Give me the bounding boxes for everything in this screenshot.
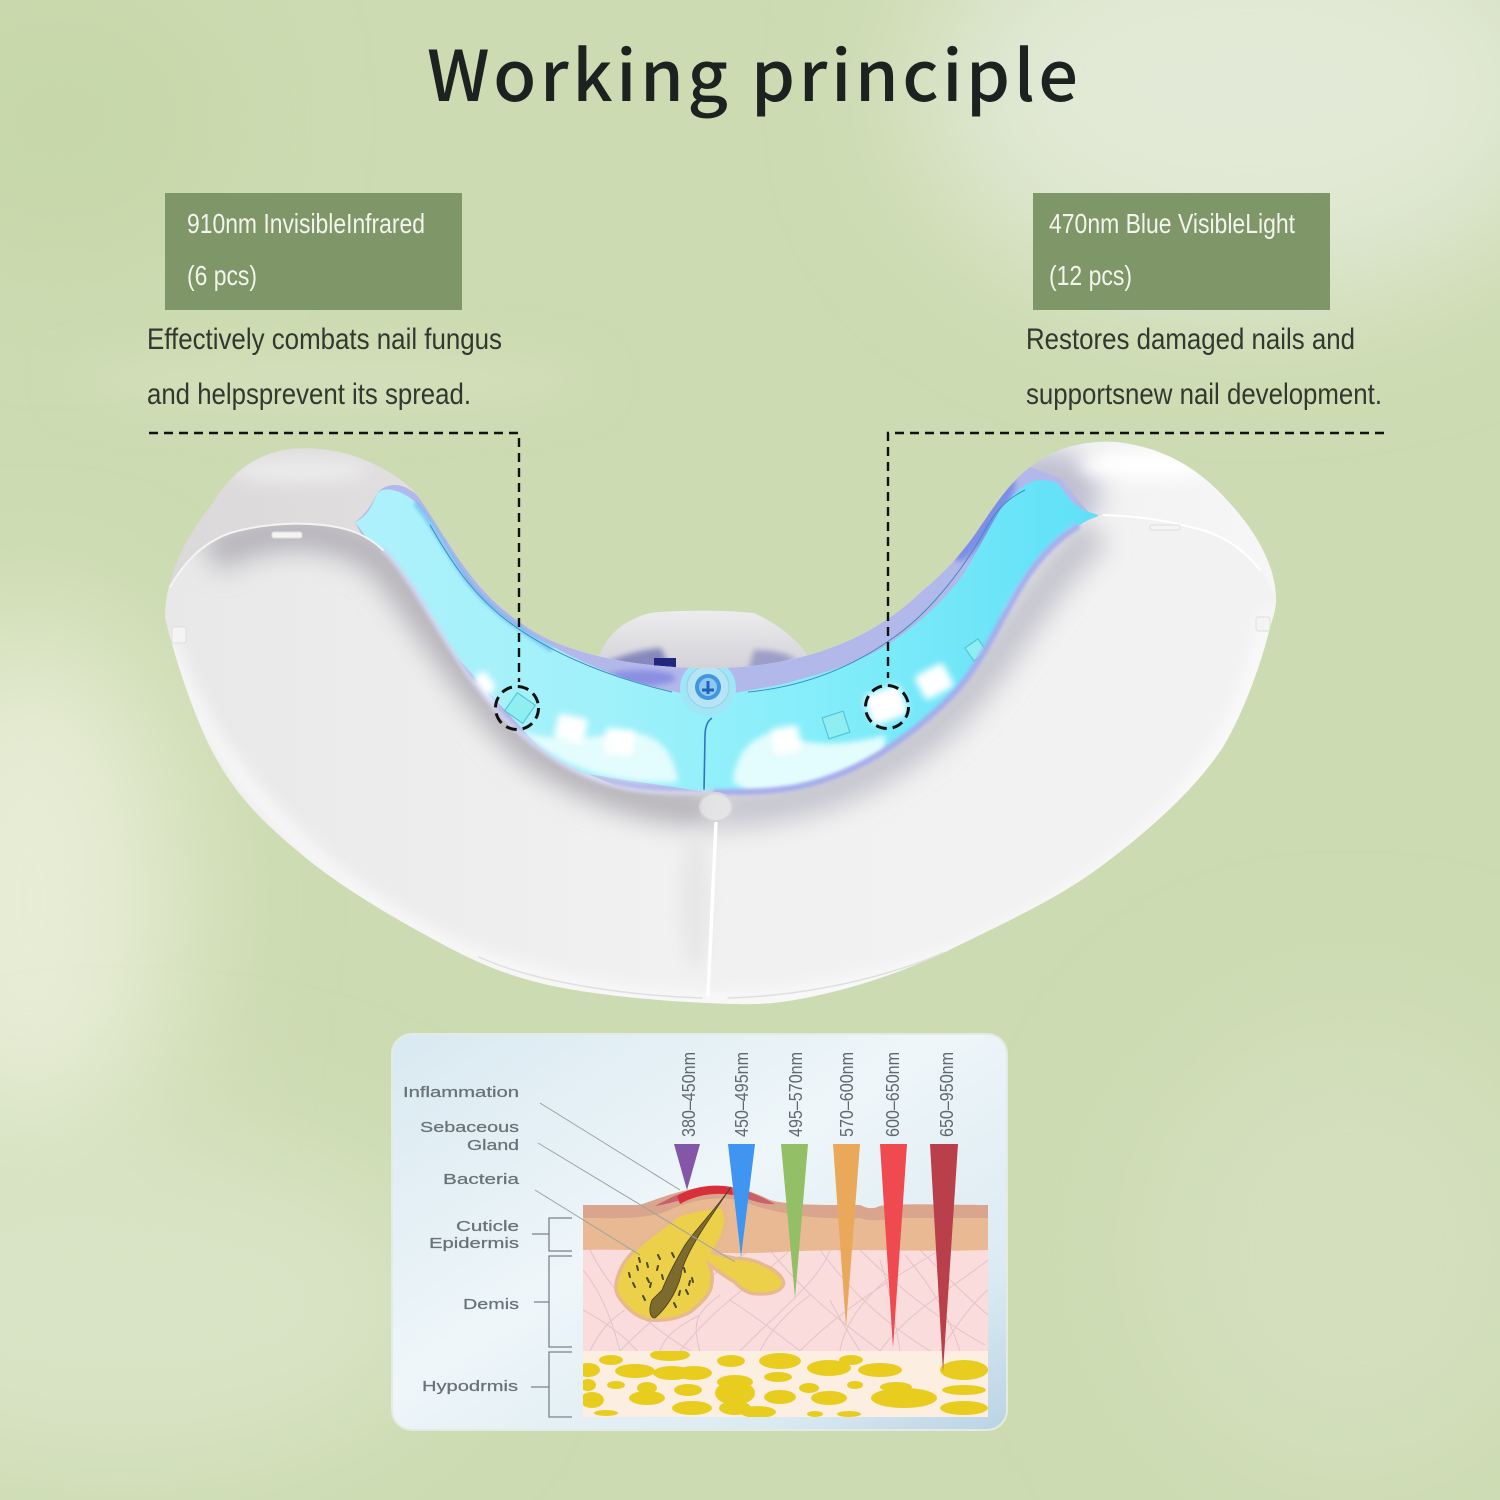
layer labels: Hypodrmis	[422, 1378, 518, 1395]
wavelength labels: 600–650nm	[883, 1052, 903, 1137]
rear stand	[597, 611, 808, 690]
wavelength labels: 380–450nm	[679, 1052, 699, 1137]
front shell face	[150, 500, 1290, 1010]
layer labels: Demis	[463, 1296, 519, 1313]
device: nail lamp	[150, 430, 1290, 1010]
description: supportsnew nail development.	[1026, 378, 1382, 411]
tag background	[1033, 193, 1330, 310]
layer labels	[403, 1084, 520, 1395]
hub with screw	[680, 668, 736, 716]
rear shell	[150, 430, 1290, 1010]
wavelength labels: 570–600nm	[837, 1052, 857, 1137]
infrared LED squares	[505, 639, 987, 739]
leader: infrared	[149, 433, 538, 730]
tag heading: 470nm Blue VisibleLight	[1049, 208, 1295, 239]
cuticle layer	[583, 1186, 988, 1220]
layer brackets	[531, 1218, 572, 1417]
layer labels: Epidermis	[429, 1235, 519, 1252]
pale lower glow	[470, 525, 1085, 800]
dermis fibres	[583, 1250, 988, 1351]
left blue stripe	[415, 503, 552, 650]
panel: 910nm infrared	[147, 193, 502, 411]
tag heading: 910nm InvisibleInfrared	[187, 208, 425, 239]
hair follicle	[650, 1187, 731, 1318]
bright LEDs	[473, 662, 955, 756]
tag count: (6 pcs)	[187, 260, 257, 291]
layer labels: Sebaceous	[420, 1119, 519, 1136]
card background	[392, 1034, 1007, 1430]
band centre seam	[704, 718, 712, 790]
description	[1026, 323, 1382, 411]
bottom clip	[700, 793, 732, 821]
rear stand openings	[606, 648, 797, 676]
wavelength wedges	[674, 1144, 958, 1372]
callout circle: infrared LED	[496, 686, 538, 730]
epidermis layer	[583, 1186, 988, 1253]
wavelength labels: 650–950nm	[937, 1052, 957, 1137]
inflammation	[655, 1186, 775, 1206]
callout circle: blue LED	[866, 686, 908, 728]
wavelength labels	[679, 1052, 957, 1137]
hypodermis layer	[583, 1351, 988, 1417]
dermis layer	[583, 1248, 988, 1351]
band rim	[355, 467, 1088, 792]
sebaceous gland	[618, 1187, 782, 1319]
leader lines	[535, 1103, 735, 1262]
glowing light band	[355, 467, 1098, 792]
panel: 470nm blue light	[1026, 193, 1382, 411]
leader: blue light	[866, 433, 1384, 728]
shell	[150, 430, 1290, 1010]
tag background	[165, 193, 462, 310]
description	[147, 323, 502, 411]
layer labels: Gland	[467, 1137, 519, 1154]
tag count: (12 pcs)	[1049, 260, 1132, 291]
panel: skin penetration chart	[392, 1034, 1007, 1430]
layer labels: Bacteria	[443, 1171, 520, 1188]
description: Effectively combats nail fungus	[147, 323, 502, 356]
description: Restores damaged nails and	[1026, 323, 1355, 356]
layer labels: Cuticle	[456, 1218, 519, 1235]
fine upper line	[430, 490, 1025, 692]
description: and helpsprevent its spread.	[147, 378, 471, 411]
wavelength labels: 495–570nm	[786, 1052, 806, 1137]
shell clip notches	[172, 525, 1270, 643]
title: Working principle	[427, 21, 1078, 122]
band cyan	[355, 480, 1098, 800]
hypodermis fat cells	[576, 1349, 988, 1418]
wavelength labels: 450–495nm	[732, 1052, 752, 1137]
bacteria dots	[629, 1253, 693, 1307]
layer labels: Inflammation	[403, 1084, 519, 1101]
shell outlines and seams	[170, 515, 1260, 998]
